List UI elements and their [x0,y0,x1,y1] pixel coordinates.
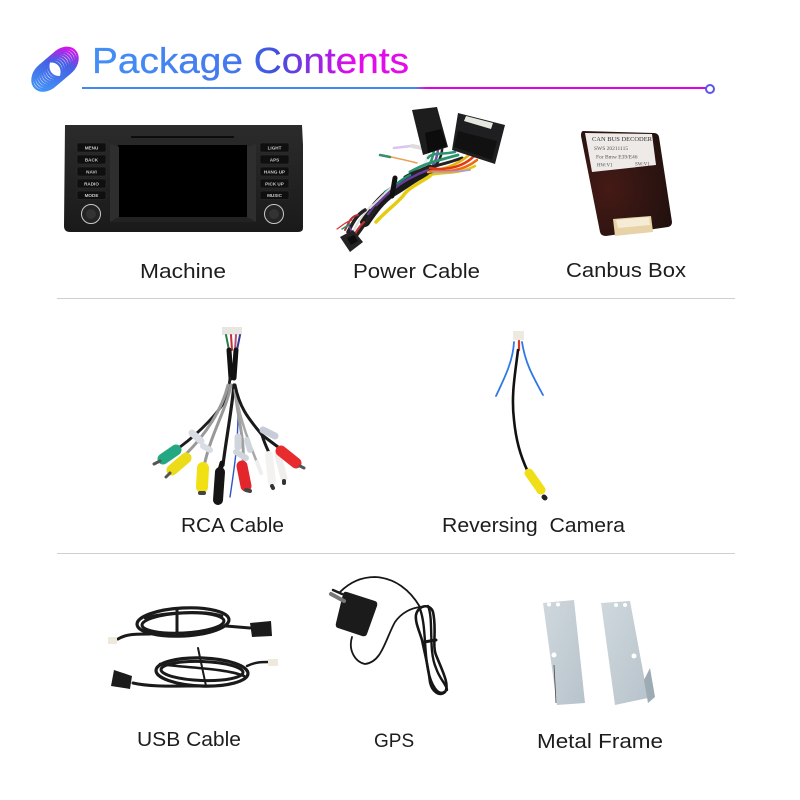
icon: head unit machine [64,125,303,232]
label: Machine: Machine [140,260,226,283]
label: GPS: GPS [374,731,414,752]
icon: canbus decoder box: CAN BUS DECODER [592,136,653,143]
icon: head unit machine: MUSIC [267,193,283,198]
icon: head unit machine: RADIO [84,182,99,186]
divider [57,298,735,299]
icon: coil logo [26,42,84,97]
icon: head unit machine: PICK UP [265,182,284,186]
icon: USB cables [108,606,278,689]
icon: reversing camera cable [496,331,545,498]
icon: canbus decoder box [581,131,672,236]
label: Metal Frame: Metal Frame [537,730,663,753]
icon: canbus decoder box: HW:V1 [597,164,613,168]
divider [57,553,735,554]
icon: canbus decoder box: SW:V1 [635,162,650,168]
icon: canbus decoder box: For Bmw E39/E46 [596,154,638,160]
icon: head unit machine: HANG UP [264,170,285,174]
title: Package Contents [92,40,409,81]
icon: head unit machine: LIGHT [268,146,282,150]
icon: head unit machine: BACK [85,158,99,162]
label: Canbus Box: Canbus Box [566,259,687,282]
icon: head unit machine: APS [270,158,279,162]
icon: metal frame brackets [543,600,655,705]
label: Power Cable: Power Cable [353,260,480,283]
icon: GPS antenna [331,577,447,694]
icon: head unit machine: MENU [85,146,99,150]
icon: canbus decoder box: SWS 20211115 [594,146,628,152]
label: USB Cable: USB Cable [137,728,241,751]
icon: power cable harness [337,107,505,252]
label: Reversing Camera: Reversing Camera [442,514,626,537]
icon: RCA cable [154,327,304,500]
label: RCA Cable: RCA Cable [181,514,284,537]
icon: head unit machine: MODE [85,193,98,198]
title underline with end marker [82,85,714,93]
icon: head unit machine: NAVI [86,170,97,174]
